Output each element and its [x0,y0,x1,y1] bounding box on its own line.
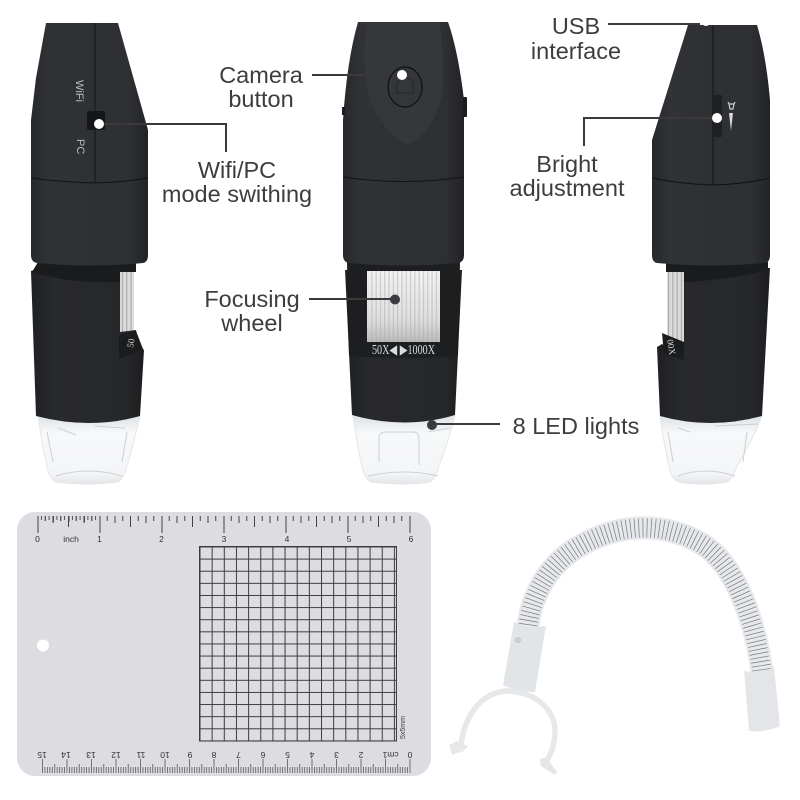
centimetre labels [37,750,412,760]
centimetre labels: 3 [334,750,339,760]
scale band text: 50 [125,337,137,348]
inch ruler fine ticks [38,516,100,522]
centimetre labels: 9 [187,750,192,760]
USB notch [702,18,710,26]
mode switch [87,111,105,130]
grid size label: 5x5mm [400,716,407,739]
anchor dot [712,113,722,123]
calibration ruler card [17,512,431,776]
inch labels: inch [63,534,79,544]
centimetre labels: 1 [382,750,387,760]
callout: LED lights [427,413,639,439]
wheel ribs [668,270,683,342]
brightness wheel [712,95,722,137]
cap detail [368,428,450,476]
brightness icon: lamp [728,102,735,109]
leader line [584,118,717,146]
centimetre labels: 0 [407,750,412,760]
mounting hole [37,640,49,652]
side button right [463,97,467,117]
upper body [343,22,464,266]
seams [31,23,148,183]
upper body [652,25,770,266]
wheel ribs [368,271,439,342]
clip tip right [540,757,557,775]
label: wheel [220,310,283,336]
centimetre ruler ticks [42,759,410,773]
centimetre labels: 7 [236,750,241,760]
centimetre labels: 12 [111,750,121,760]
leader line [312,74,365,76]
middle microscope: front view [342,22,467,484]
WiFi label: WiFi [73,80,85,102]
inch labels: 0 [35,534,40,544]
centimetre labels: cm [387,750,399,760]
centimetre labels: 4 [309,750,314,760]
label: Bright [536,151,598,177]
label: adjustment [510,175,625,201]
anchor dot [427,420,437,430]
transparent lens cap [660,416,762,484]
dark band [347,262,460,358]
camera icon [397,76,413,93]
flexible tube [528,528,762,672]
centimetre labels: 6 [260,750,265,760]
label: mode swithing [162,181,312,207]
label: Camera [219,62,304,88]
label: Wifi/PC [198,157,276,183]
transparent lens cap [38,416,140,484]
callout: brightness adjustment [510,113,722,201]
seam [343,177,464,182]
right microscope: side view [652,18,770,484]
PC label: PC [74,139,86,154]
centimetre labels: 2 [358,750,363,760]
camera button [388,67,422,107]
lighter front shield [364,22,443,145]
centimetre labels: 8 [211,750,216,760]
centimetre labels: 15 [37,750,47,760]
scale band [119,331,143,359]
leader line [309,298,395,300]
callout: USB interface [531,13,700,64]
magnification scale text: 50X◀ ▶1000X [372,342,435,357]
cap detail [668,424,758,476]
callout: camera button [219,62,407,112]
inch labels: 3 [222,534,227,544]
centimetre labels: 5 [285,750,290,760]
dark collar [32,262,136,282]
inch labels: 4 [285,534,290,544]
cap detail [47,426,127,476]
card [17,512,431,776]
inch labels [35,534,414,544]
inch labels: 2 [159,534,164,544]
wheel ribs [121,270,133,342]
centimetre labels: 13 [86,750,96,760]
side button left [342,107,345,115]
transparent lens cap [353,416,455,484]
centimetre labels: 14 [61,750,71,760]
label: 8 LED lights [513,413,639,439]
centimetre labels: 10 [160,750,170,760]
label: USB [552,13,600,39]
anchor dot [94,119,104,129]
lower body [657,268,770,423]
tube ribs [528,528,762,672]
lower body [31,268,144,423]
measurement grid [200,546,396,741]
seams [652,25,770,185]
scale band text: 00X [665,339,678,356]
lower collar [744,667,780,731]
callout: Wifi/PC mode switching [94,119,312,207]
dark collar [666,262,768,282]
inch ruler ticks [38,516,412,534]
upper body [31,23,148,266]
label: interface [531,38,621,64]
clip tip left [449,741,468,755]
focusing wheel [367,271,440,342]
anchor dot [397,70,407,80]
anchor dot [390,294,400,304]
collar screw [516,638,520,642]
clip ring [461,691,555,763]
flexible gooseneck stand [449,528,780,775]
inch labels: 6 [409,534,414,544]
inch labels: 1 [97,534,102,544]
inch labels: 5 [347,534,352,544]
brightness icon: wedge [729,113,733,131]
left microscope: side view [31,23,148,484]
leader line [432,423,500,425]
label: button [228,86,294,112]
scale band [662,333,684,360]
leader line [608,23,700,25]
centimetre labels: 11 [136,750,145,760]
leader line [99,124,226,152]
callout: focusing wheel [204,286,400,336]
focusing wheel edge [120,270,134,342]
focusing wheel edge [667,270,684,342]
lower body [345,270,462,422]
upper collar [503,622,546,692]
label: Focusing [204,286,300,312]
